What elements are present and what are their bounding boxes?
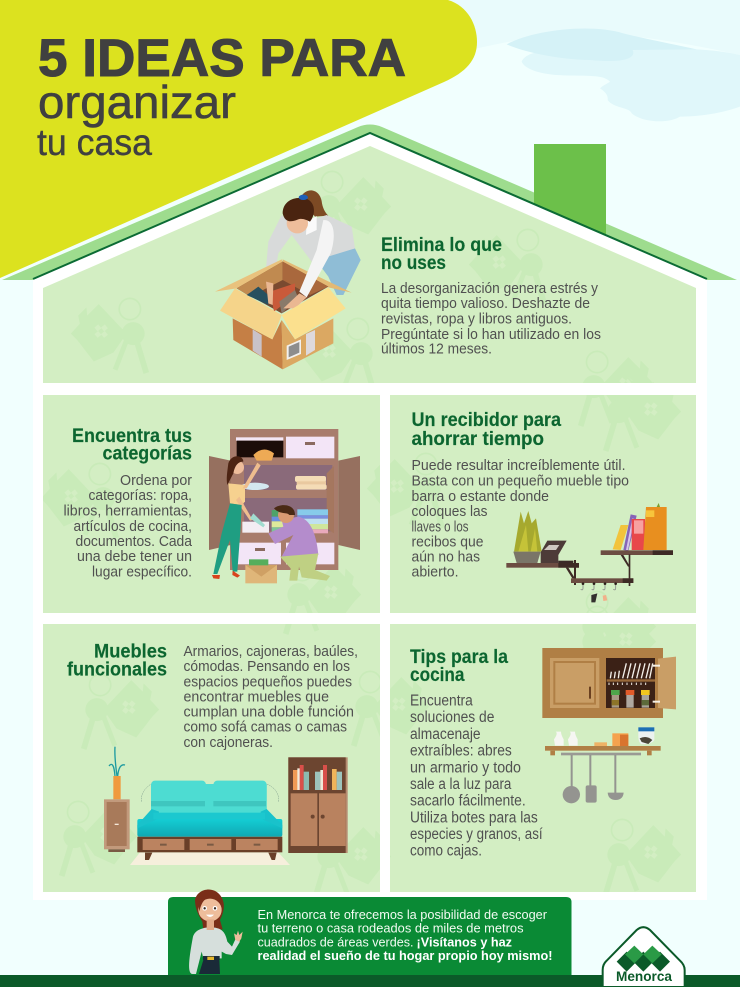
logo: Menorca xyxy=(603,927,685,987)
heading and text: un recibidor para ahorrar tiempo: aún no has xyxy=(412,550,480,566)
banner text: cuadrados de áreas verdes. xyxy=(258,934,414,949)
heading and text: tips para la cocina: Utiliza botes para las xyxy=(410,810,538,826)
heading: muebles funcionales: funcionales xyxy=(67,660,167,680)
character: woman presenter xyxy=(189,890,243,974)
text: muebles funcionales xyxy=(184,644,358,751)
roof line xyxy=(33,133,707,279)
heading and text: un recibidor para ahorrar tiempo: coloques las xyxy=(412,504,488,520)
heading and text: encuentra tus categorias: categorías: ropa, xyxy=(88,488,192,504)
heading and text: tips para la cocina: como cajas. xyxy=(410,842,482,860)
heading and text: elimina lo que no uses: últimos 12 meses. xyxy=(381,342,492,358)
heading and text: encuentra tus categorias xyxy=(64,426,193,580)
title: tu casa xyxy=(37,122,152,163)
heading and text: un recibidor para ahorrar tiempo: barra o estante donde xyxy=(412,489,549,505)
heading and text: un recibidor para ahorrar tiempo: Basta con un pequeño mueble tipo xyxy=(412,474,629,490)
heading and text: tips para la cocina: cocina xyxy=(410,665,465,686)
banner text: ¡Visítanos y haz xyxy=(416,934,512,949)
heading and text: encuentra tus categorias: Ordena por xyxy=(120,473,192,489)
banner text: realidad el sueño de tu hogar propio hoy mismo! xyxy=(258,948,552,963)
heading and text: elimina lo que no uses: Pregúntate si lo han utilizado en los xyxy=(381,327,601,343)
heading and text: elimina lo que no uses: La desorganización genera estrés y xyxy=(381,281,599,297)
text: muebles funcionales: con cajoneras. xyxy=(184,735,273,751)
heading and text: tips para la cocina: almacenaje xyxy=(410,726,481,743)
heading: muebles funcionales: Muebles xyxy=(94,642,167,662)
heading and text: tips para la cocina: Encuentra xyxy=(410,692,473,710)
heading and text: tips para la cocina: Tips para la xyxy=(410,647,508,668)
house body xyxy=(33,133,707,900)
heading and text: tips para la cocina: extraíbles: abres xyxy=(410,742,512,760)
text: muebles funcionales: como sofá camas o camas xyxy=(184,720,347,736)
heading and text: un recibidor para ahorrar tiempo: abierto. xyxy=(412,564,458,580)
heading and text: encuentra tus categorias: libros, herramientas, xyxy=(64,504,192,520)
clouds xyxy=(450,0,740,121)
heading: muebles funcionales xyxy=(67,642,167,680)
illustration: wall shelves with plant, books and key hooks xyxy=(506,503,673,602)
heading and text: tips para la cocina: sacarlo fácilmente. xyxy=(410,792,526,810)
heading and text: elimina lo que no uses: Elimina lo que xyxy=(381,235,502,256)
heading and text: tips para la cocina: sale a la luz para xyxy=(410,776,512,793)
text: muebles funcionales: espacios pequeños puedes xyxy=(184,674,352,690)
heading and text: un recibidor para ahorrar tiempo: Un recibidor para xyxy=(412,410,561,431)
heading and text: elimina lo que no uses xyxy=(381,235,601,358)
panel: tips para la cocina background xyxy=(390,624,696,892)
bottom strip xyxy=(0,975,740,987)
text: muebles funcionales: Armarios, cajoneras, baúles, xyxy=(184,644,358,660)
heading and text: tips para la cocina: un armario y todo xyxy=(410,760,521,776)
roof band xyxy=(2,124,737,280)
heading and text: elimina lo que no uses: revistas, ropa y libros antiguos. xyxy=(381,312,572,328)
heading and text: un recibidor para ahorrar tiempo: Puede resultar increíblemente útil. xyxy=(412,458,626,474)
banner text xyxy=(258,907,552,963)
heading and text: encuentra tus categorias: una debe tener un xyxy=(77,549,192,565)
heading and text: encuentra tus categorias: documentos. Cada xyxy=(76,534,193,550)
text: muebles funcionales: cumplan una doble función xyxy=(184,704,354,720)
heading and text: un recibidor para ahorrar tiempo: recibos que xyxy=(412,534,484,550)
house and key watermarks xyxy=(41,171,681,896)
banner xyxy=(168,897,572,975)
illustration: sofa bed, side table and bookcase xyxy=(104,747,348,865)
heading and text: un recibidor para ahorrar tiempo: ahorrar tiempo xyxy=(412,429,544,450)
heading and text: un recibidor para ahorrar tiempo: llaves o los xyxy=(412,520,468,536)
title: organizar xyxy=(38,76,236,128)
heading and text: elimina lo que no uses: quita tiempo valioso. Deshazte de xyxy=(381,296,590,312)
text: muebles funcionales: cómodas. Pensando en los xyxy=(184,659,350,675)
text: muebles funcionales: encontrar muebles que xyxy=(184,690,329,706)
illustration: couple organizing wardrobe xyxy=(209,429,360,583)
panel: encuentra tus categorias background xyxy=(43,395,380,613)
panel: muebles funcionales background xyxy=(43,624,380,892)
heading and text: tips para la cocina: especies y granos, así xyxy=(410,826,543,843)
banner text: tu terreno o casa rodeados de miles de metros xyxy=(258,921,524,936)
heading and text: un recibidor para ahorrar tiempo xyxy=(412,410,629,580)
panel: elimina lo que no uses background xyxy=(43,146,696,383)
heading and text: encuentra tus categorias: Encuentra tus xyxy=(72,426,192,447)
logo: Menorca: Menorca xyxy=(616,969,672,984)
title: 5 IDEAS PARA xyxy=(38,29,406,88)
heading and text: encuentra tus categorias: artículos de cocina, xyxy=(74,519,192,535)
heading and text: encuentra tus categorias: categorías xyxy=(102,444,192,464)
banner text: En Menorca te ofrecemos la posibilidad de escoger xyxy=(258,907,548,922)
title background shape xyxy=(0,0,477,278)
heading and text: encuentra tus categorias: lugar específico. xyxy=(92,564,192,580)
chimney xyxy=(534,144,606,236)
illustration: kitchen cabinet and utensil shelf xyxy=(542,648,676,803)
heading and text: tips para la cocina xyxy=(410,647,543,860)
heading and text: tips para la cocina: soluciones de xyxy=(410,709,494,726)
heading and text: elimina lo que no uses: no uses xyxy=(381,253,446,274)
illustration: woman sorting a cardboard box xyxy=(215,190,361,369)
title xyxy=(37,29,406,163)
panel: un recibidor background xyxy=(390,395,696,613)
